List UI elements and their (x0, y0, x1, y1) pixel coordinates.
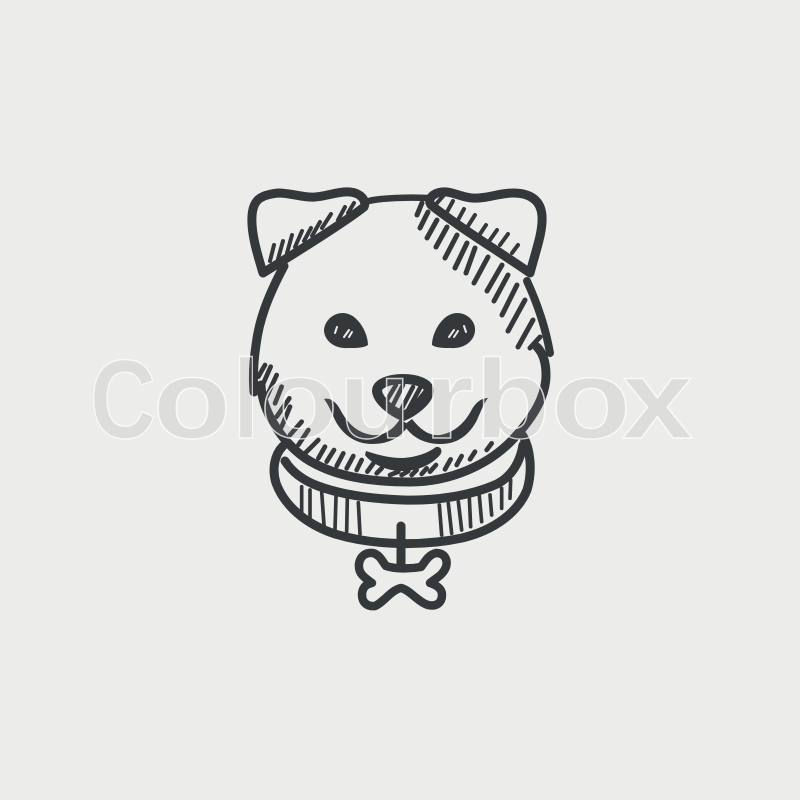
watermark: l (233, 337, 259, 462)
left eye (324, 313, 368, 348)
right ear (430, 192, 542, 273)
bone tag (359, 526, 447, 606)
head shading hatches (258, 365, 492, 475)
watermark (90, 337, 693, 462)
head outline (253, 198, 550, 482)
chin (365, 447, 441, 471)
watermark: b (475, 337, 550, 462)
right eye (432, 313, 475, 348)
watermark: o (260, 337, 338, 462)
watermark: o (551, 337, 631, 462)
watermark: o (153, 337, 231, 462)
watermark: x (622, 337, 693, 462)
watermark: C (90, 337, 156, 462)
left ear (252, 192, 365, 273)
collar (274, 436, 530, 544)
collar stripes (302, 480, 511, 535)
watermark: u (339, 337, 411, 462)
dog sketch icon (252, 192, 550, 606)
watermark: r (424, 337, 474, 462)
nose (377, 379, 429, 416)
forehead shading hatches (417, 203, 540, 348)
smile (324, 398, 488, 444)
